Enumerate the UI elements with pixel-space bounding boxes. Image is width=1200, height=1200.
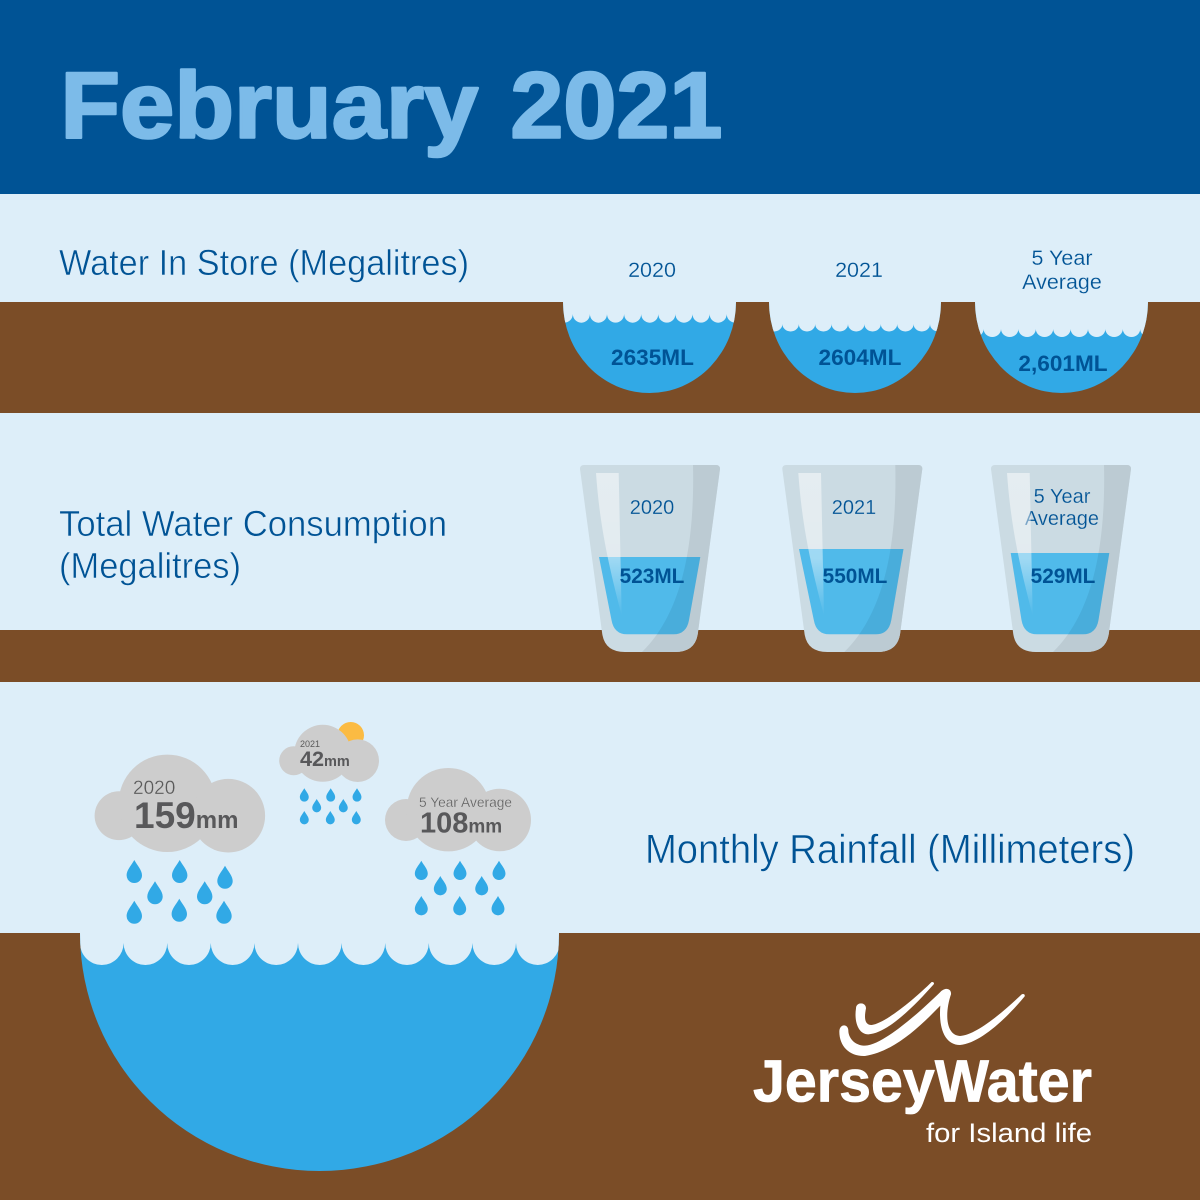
reservoir 5 year average: Average	[1022, 270, 1102, 294]
glass 2021: 2021	[832, 497, 876, 519]
reservoir 5 year average: 2,601ML	[1018, 351, 1108, 376]
logo tagline: for Island life	[926, 1118, 1092, 1148]
panel: monthly rainfall	[0, 722, 1200, 1200]
logo wordmark: JerseyWater	[753, 1049, 1092, 1115]
heading: total water consumption: Total Water Consumption	[59, 503, 447, 544]
reservoir 2020	[563, 262, 736, 393]
glass 5 year average	[991, 465, 1131, 652]
heading: monthly rainfall: Monthly Rainfall (Millimeters)	[645, 826, 1135, 872]
reservoir 2021: 2021	[835, 258, 883, 282]
raindrops 2021	[300, 788, 361, 824]
cloud 5 year average: 108mm	[420, 808, 502, 840]
panel: water in store	[0, 242, 1200, 413]
cloud 2021	[279, 725, 379, 782]
raindrops 5 year average	[415, 861, 505, 915]
glass 2021: 550ML	[823, 565, 888, 588]
heading: total water consumption: (Megalitres)	[59, 545, 241, 586]
glass 5 year average: Average	[1025, 508, 1099, 530]
glass 2020	[580, 465, 720, 652]
reservoir 2021: 2604ML	[819, 345, 902, 370]
cloud 2020	[95, 755, 265, 852]
reservoir: large	[80, 925, 560, 1171]
cloud 2020: 2020	[133, 778, 175, 799]
glass 2020: 523ML	[620, 565, 685, 588]
reservoir 2020: 2020	[628, 258, 676, 282]
icon: wave mark	[839, 982, 1025, 1056]
panel: total water consumption	[0, 465, 1200, 682]
cloud 2021: 2021	[300, 739, 320, 749]
glass 5 year average: 529ML	[1031, 565, 1096, 588]
header banner	[0, 0, 1200, 194]
glass 2021	[782, 465, 922, 652]
raindrops 2020	[127, 860, 233, 924]
reservoir 2020: 2635ML	[611, 345, 694, 370]
reservoir 5 year average: 5 Year	[1032, 246, 1092, 270]
glass 5 year average: 5 Year	[1034, 486, 1091, 508]
glass 2020: 2020	[630, 497, 674, 519]
title: 2021	[510, 52, 722, 158]
cloud 5 year average	[385, 768, 531, 851]
cloud 2020: 159mm	[134, 795, 238, 836]
reservoir 5 year average	[975, 250, 1148, 393]
logo: Jersey Water	[753, 982, 1092, 1148]
title: February	[60, 52, 478, 158]
cloud 2021: 42mm	[300, 746, 350, 771]
reservoir 2021	[769, 262, 941, 393]
cloud 5 year average: 5 Year Average	[419, 794, 512, 810]
icon: sun	[337, 722, 364, 749]
heading: water in store: Water In Store (Megalitres)	[59, 242, 469, 283]
